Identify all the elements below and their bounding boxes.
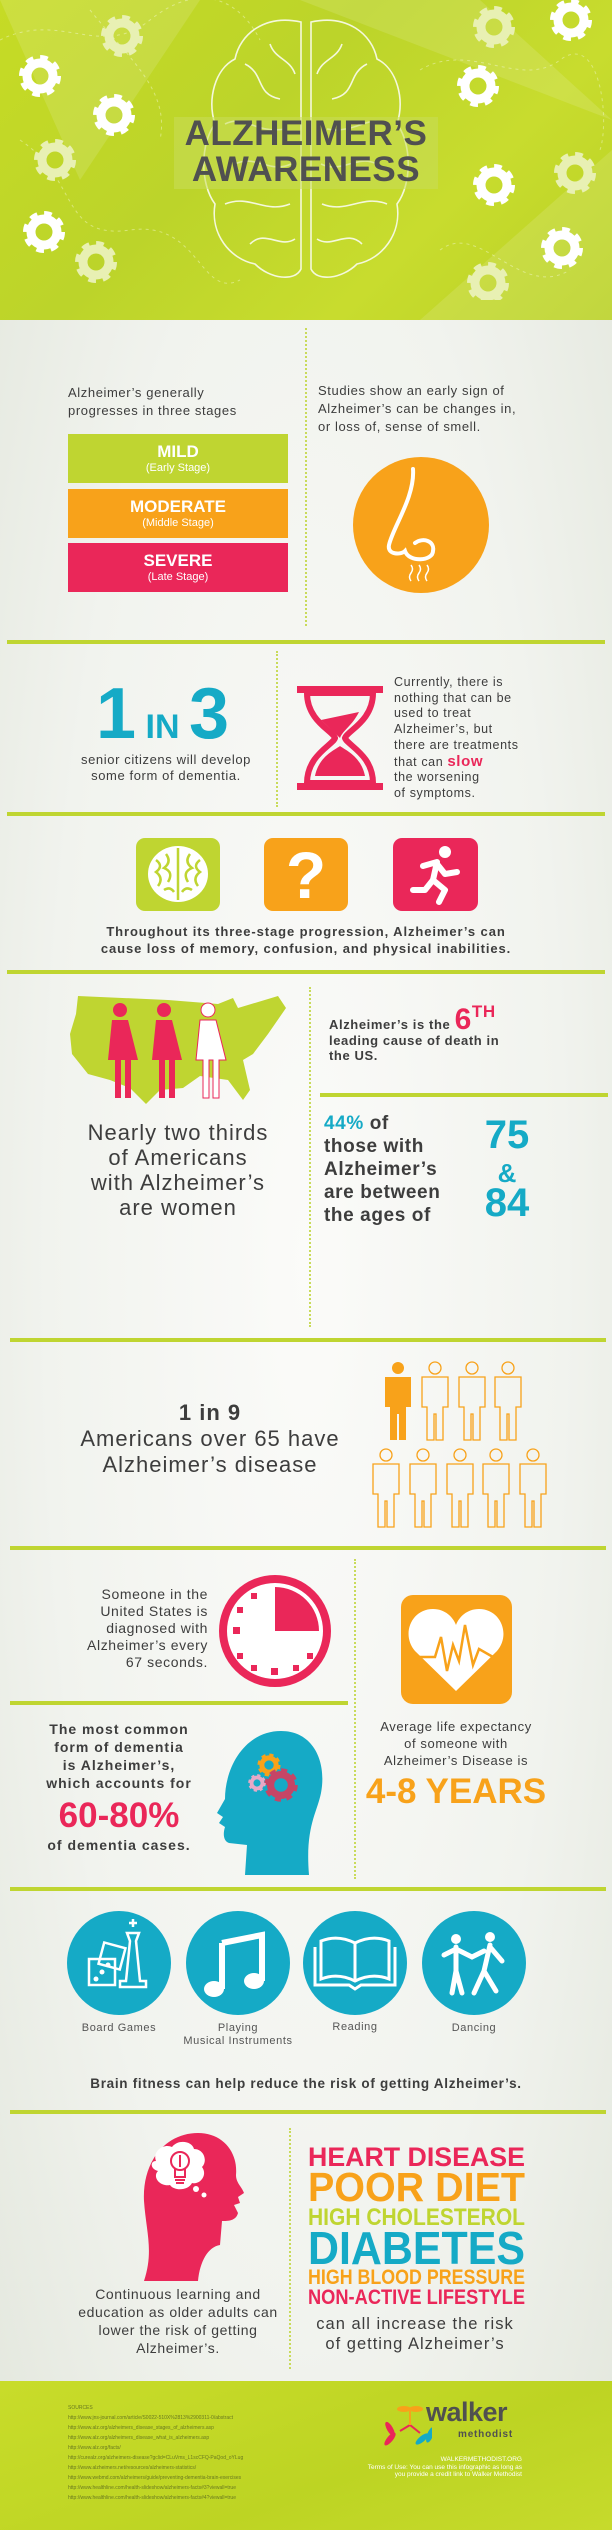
text: 4-8 YEARS: [366, 1772, 546, 1811]
text: 60-80%: is Alzheimer’s,: [63, 1757, 175, 1773]
text: two thirds women: Nearly two thirds: [88, 1120, 268, 1145]
stat: 1 in 3: 1 IN 3: [96, 674, 229, 754]
icon: head with gears: [217, 1731, 322, 1875]
icon: book: [303, 1911, 407, 2015]
icon: nose: [353, 457, 489, 593]
icon: hourglass: [297, 686, 383, 790]
text: 60-80%: which accounts for: [46, 1775, 192, 1791]
icon: runner: [393, 838, 478, 911]
text: 6th leading cause: [329, 1002, 499, 1063]
icon: question: ?: [286, 838, 326, 912]
icon: board games: [67, 1911, 171, 2015]
text: smell: or loss of, sense of smell.: [318, 419, 481, 434]
text: symptoms: Throughout its three-stage progression, Alzheimer’s can: [106, 924, 506, 939]
text: website and terms: [368, 2456, 522, 2478]
sources list: http://www.webmd.com/alzheimers/guide/preventing-dementia-brain-exercises: [68, 2475, 241, 2481]
text: 60-80%: [46, 1721, 192, 1853]
stat: 1 in 3: [81, 674, 251, 783]
icon: people 1 of 9: [372, 1361, 547, 1528]
sources list: http://www.alz.org/facts/: [68, 2445, 121, 2451]
stat: 44% ages 75-84: 75: [485, 1113, 529, 1157]
icon: dancing: [422, 1911, 526, 2015]
icons: symptoms: [136, 838, 478, 912]
sources list: http://www.alzheimers.net/resources/alzheimers-statistics/: [68, 2465, 196, 2471]
text: risk factors: POOR DIET: [308, 2164, 525, 2210]
text: 60-80%: form of dementia: [54, 1739, 184, 1755]
icon: US map with women: [70, 996, 286, 1104]
text: treatments: that can slow: [394, 753, 483, 770]
stat: 1 in 9: 1 in 9: [179, 1400, 241, 1425]
stage: severe: (Late Stage): [148, 571, 208, 583]
text: continuous learning: lower the risk of getting: [99, 2322, 257, 2338]
text: two thirds women: are women: [119, 1195, 237, 1220]
footer: [0, 2381, 612, 2530]
stat: 44% ages 75-84: 44% of: [324, 1113, 389, 1134]
icons: brain fitness activities: Dancing: [452, 2022, 496, 2034]
stat: 1 in 3: some form of dementia.: [91, 768, 241, 783]
stat: 44% ages 75-84: 84: [485, 1181, 529, 1225]
icon: brain outline: [203, 19, 409, 278]
sources list: http://www.jns-journal.com/article/S0022-510X%2813%2900311-0/abstract: [68, 2415, 233, 2421]
text: continuous learning: [78, 2286, 278, 2356]
text: can all increase the risk: [316, 2315, 514, 2333]
text: of getting Alzheimer’s: [325, 2335, 505, 2353]
icons: brain fitness activities: Playing: [218, 2022, 258, 2034]
text: life expectancy: of someone with: [404, 1736, 508, 1751]
text: brain fitness: Brain fitness can help reduce the risk of getting Alzheimer’s.: [90, 2076, 522, 2091]
icon: heart monitor: [401, 1595, 512, 1704]
text: 67 seconds: United States is: [100, 1603, 208, 1619]
icons: brain fitness activities: Reading: [332, 2021, 378, 2033]
text: 60-80%: of dementia cases.: [47, 1837, 191, 1853]
text: treatments: there are treatments: [394, 738, 519, 752]
text: treatments: of symptoms.: [394, 786, 476, 800]
text: two thirds women: with Alzheimer’s: [91, 1170, 265, 1195]
stat: 44% ages 75-84: Alzheimer’s: [324, 1159, 437, 1180]
stat: 1 in 9: Alzheimer’s disease: [102, 1452, 318, 1477]
header banner: AWARENESS: [192, 150, 420, 189]
text: symptoms: cause loss of memory, confusion, and physical inabilities.: [101, 940, 511, 956]
stage: moderate: (Middle Stage): [142, 517, 214, 529]
text: 6th leading cause: leading cause of death in: [329, 1032, 499, 1048]
stat: 44% ages 75-84: &: [498, 1158, 516, 1188]
stat: 44% ages 75-84: those with: [324, 1136, 424, 1157]
text: 6th leading cause: Alzheimer’s is the 6TH: [329, 1002, 496, 1036]
stage: mild: MILD: [157, 442, 199, 461]
title: [174, 117, 438, 189]
text: 67 seconds: Alzheimer’s every: [87, 1637, 208, 1653]
logo: walker methodist: [384, 2397, 513, 2446]
text: life expectancy: Average life expectancy: [380, 1719, 532, 1734]
text: treatments: Alzheimer’s, but: [394, 722, 493, 736]
text: continuous learning: education as older adults can: [78, 2304, 278, 2320]
sources list: http://curealz.org/alzheimers-disease?gclid=CLuVms_L1scCFQ-PaQod_oYLug: [68, 2455, 243, 2461]
text: two thirds women: [88, 1120, 268, 1220]
icons: brain fitness activities: [67, 1911, 526, 2047]
text: 6th leading cause: the US.: [329, 1048, 378, 1063]
panel: stages: Alzheimer’s generally: [68, 385, 204, 400]
text: 60-80%: 60-80%: [59, 1796, 179, 1835]
icon: gears: [19, 0, 596, 300]
sources list: http://www.healthline.com/health-slideshow/alzheimers-facts#3?viewall=true: [68, 2485, 236, 2491]
icon: music note: [186, 1911, 290, 2015]
logo: walker methodist: methodist: [458, 2429, 513, 2440]
text: website and terms: you provide a credit link to Walker Methodist: [395, 2471, 522, 2478]
labels: activities: Board Games: [82, 2022, 156, 2034]
stage: mild: (Early Stage): [146, 462, 210, 474]
text: treatments: used to treat: [394, 706, 471, 720]
stat: 1 in 9: Americans over 65 have: [80, 1426, 340, 1451]
text: symptoms: [101, 924, 511, 956]
text: smell: [318, 383, 516, 434]
text: treatments: the worsening: [394, 770, 480, 784]
stat: 1 in 3: senior citizens will develop: [81, 752, 251, 767]
text: 67 seconds: Someone in the: [102, 1586, 208, 1602]
panel: stages: progresses in three stages: [68, 403, 237, 418]
sources list: SOURCES: [68, 2405, 93, 2411]
icon: head with lightbulb: [144, 2133, 244, 2281]
text: 60-80%: The most common: [49, 1721, 189, 1737]
stat: 44% ages 75-84: [324, 1113, 530, 1226]
text: 67 seconds: diagnosed with: [106, 1620, 208, 1636]
text: two thirds women: of Americans: [108, 1145, 248, 1170]
stat: 44% ages 75-84: are between: [324, 1182, 440, 1203]
icon: brain: [136, 838, 220, 911]
text: smell: Alzheimer’s can be changes in,: [318, 401, 516, 416]
text: treatments: Currently, there is: [394, 675, 503, 689]
text: continuous learning: Alzheimer’s.: [136, 2340, 220, 2356]
stage: mild: [68, 434, 288, 483]
logo: walker methodist: walker: [426, 2397, 507, 2427]
panel: stages: [68, 385, 288, 592]
text: treatments: [394, 675, 519, 800]
sources list: http://www.alz.org/alzheimers_disease_stages_of_alzheimers.asp: [68, 2425, 214, 2431]
header banner: ALZHEIMER’S: [185, 114, 427, 153]
icon: clock: [219, 1575, 331, 1687]
stage: severe: [68, 543, 288, 592]
text: continuous learning: Continuous learning and: [95, 2286, 261, 2302]
text: website and terms: WALKERMETHODIST.ORG: [441, 2456, 522, 2463]
stage: severe: SEVERE: [144, 551, 212, 570]
stat: 1 in 9: [80, 1400, 340, 1477]
text: life expectancy: [380, 1719, 532, 1768]
header banner: [0, 0, 612, 320]
stage: moderate: [68, 489, 288, 538]
icons: brain fitness activities: Musical Instruments: [183, 2035, 293, 2047]
text: life expectancy: Alzheimer’s Disease is: [384, 1753, 528, 1768]
sources list: [68, 2405, 243, 2501]
text: website and terms: Terms of Use: You can use this infographic as long as: [368, 2464, 522, 2470]
stat: 44% ages 75-84: the ages of: [324, 1205, 431, 1226]
sources list: http://www.healthline.com/health-slideshow/alzheimers-facts#4?viewall=true: [68, 2495, 236, 2501]
text: smell: Studies show an early sign of: [318, 383, 504, 398]
text: risk factors: [308, 2142, 525, 2309]
text: 67 seconds: [87, 1586, 208, 1670]
icon: question: [264, 838, 348, 911]
stage: moderate: MODERATE: [130, 497, 226, 516]
text: treatments: nothing that can be: [394, 691, 512, 705]
text: 67 seconds: 67 seconds.: [126, 1654, 208, 1670]
sources list: http://www.alz.org/alzheimers_disease_what_is_alzheimers.asp: [68, 2435, 209, 2441]
text: risk factors: HEART DISEASE: [308, 2142, 525, 2172]
